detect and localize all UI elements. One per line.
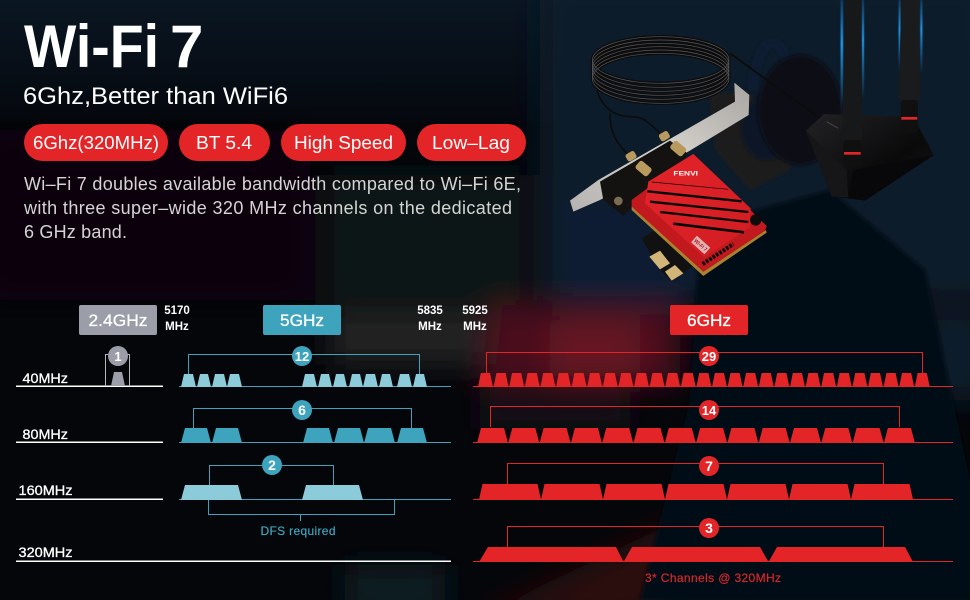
pill: BT 5.4: BT 5.4 — [196, 133, 252, 153]
6GHz 40MHz channels: 29 — [702, 349, 716, 364]
pill: BT 5.4 — [179, 124, 270, 161]
band header: 2.4GHz: 2.4GHz — [88, 311, 148, 330]
description text: 6 GHz band. — [24, 222, 127, 242]
band header: 2.4GHz — [79, 305, 157, 335]
product: Wi-Fi 7 PCIe card with antenna base — [570, 0, 934, 282]
description text — [23, 174, 521, 242]
band header: 5GHz — [263, 305, 341, 335]
pill: 6GHz 320MHz — [24, 124, 168, 161]
frequency label: 5835 MHz — [417, 305, 443, 333]
band header: 6GHz — [670, 305, 748, 335]
6GHz 160MHz channels — [473, 456, 953, 500]
title: Wi-Fi — [24, 13, 159, 80]
6GHz 80MHz channels: 14 — [702, 403, 717, 418]
pill: High Speed — [281, 124, 406, 161]
6GHz 320MHz channels: 3 — [705, 520, 713, 536]
row label: 40MHz: 40MHz — [22, 370, 68, 386]
5GHz 40MHz channels: 12 — [295, 349, 309, 364]
2.4GHz 40MHz channel: 1 — [114, 349, 122, 364]
feature pills — [24, 124, 526, 161]
6GHz 80MHz channels — [473, 400, 953, 443]
5GHz 160MHz channels and DFS note: 2 — [268, 457, 276, 473]
frequency label: 5925 MHz: MHz — [463, 321, 487, 333]
title: 7 — [170, 13, 203, 80]
5GHz 80MHz channels — [179, 400, 451, 443]
5GHz 160MHz channels and DFS note — [179, 455, 451, 538]
5GHz 160MHz channels and DFS note: DFS required — [260, 524, 336, 538]
icon: antennas with blue glow — [841, 0, 922, 167]
icon: coiled antenna cable — [592, 37, 820, 155]
band header: 5GHz: 5GHz — [280, 311, 324, 330]
5GHz 40MHz channels — [179, 346, 451, 387]
320MHz channel note: 3* Channels @ 320MHz — [645, 571, 781, 585]
subtitle: 6Ghz,Better than WiFi6 — [23, 83, 288, 110]
person silhouette — [640, 190, 970, 600]
frequency label: 5170 MHz — [164, 305, 190, 333]
6GHz 320MHz channels — [473, 518, 953, 562]
icon: red heatsink card — [632, 154, 767, 276]
pill: High Speed: High Speed — [294, 133, 393, 153]
pill: Low-Lag — [417, 124, 526, 161]
frequency label: 5170 MHz: MHz — [165, 321, 189, 333]
icon: antenna base — [806, 114, 934, 201]
band header: 6GHz: 6GHz — [687, 311, 731, 330]
row label: 320MHz: 320MHz — [18, 544, 72, 560]
frequency label: 5925 MHz: 5925 — [462, 305, 488, 317]
row label: 80MHz: 80MHz — [22, 426, 68, 442]
description text: Wi–Fi 7 doubles available bandwidth compared to Wi–Fi 6E, — [24, 174, 521, 194]
5GHz 80MHz channels: 6 — [298, 402, 306, 418]
frequency label: 5170 MHz: 5170 — [164, 305, 190, 317]
frequency label: 5835 MHz: MHz — [418, 321, 442, 333]
icon: silver mounting bracket — [570, 83, 749, 212]
icon: PCIe edge connector — [642, 231, 697, 282]
card logo: FENVI — [673, 172, 698, 178]
6GHz 40MHz channels — [473, 346, 953, 387]
frequency label: 5835 MHz: 5835 — [417, 305, 443, 317]
2.4GHz 40MHz channel — [106, 346, 130, 386]
icon: connectors and PCB — [600, 130, 688, 216]
pill: Low-Lag: Low–Lag — [432, 133, 510, 153]
card badge: WI-FI 7 — [692, 238, 708, 253]
6GHz 160MHz channels: 7 — [705, 458, 713, 474]
frequency label: 5925 MHz — [462, 305, 488, 333]
description text: with three super–wide 320 MHz channels on the dedicated — [23, 198, 512, 218]
pill: 6GHz 320MHz: 6Ghz(320MHz) — [33, 133, 159, 153]
row label: 160MHz: 160MHz — [18, 482, 72, 498]
